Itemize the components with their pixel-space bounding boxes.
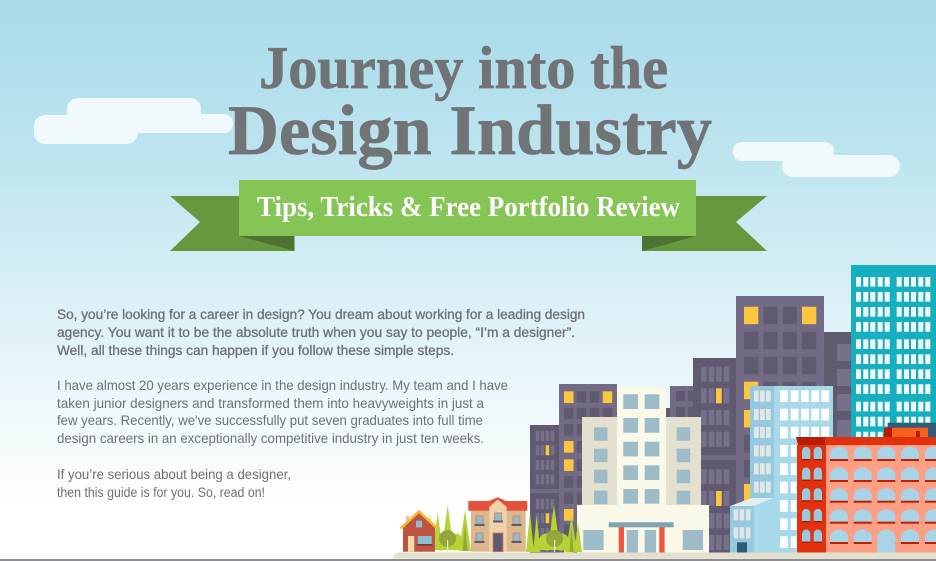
building: small purple behind [665,386,694,506]
building: cream hotel [577,387,709,553]
experience paragraph: I have almost 20 years experience in the design industry. My team and I have [57,378,508,393]
building: dark far left [530,425,559,553]
building: dark right rear [824,332,852,442]
banner ribbon [170,180,767,251]
trees: by hotel [526,505,582,552]
closing paragraph [57,467,291,500]
trees: between houses [428,505,471,552]
building: red brick block [796,423,936,553]
building: purple left [559,384,617,553]
building: tall dark [693,358,737,553]
intro paragraph: Well, all these things can happen if you follow these simple steps. [57,343,454,358]
experience paragraph: taken junior designers and transformed them into heavyweights in just a [57,396,484,411]
building: teal tower [851,265,936,445]
building: light blue tower [750,386,833,553]
house: two-storey tan [468,497,527,552]
closing paragraph: then this guide is for you. So, read on! [57,485,265,500]
experience paragraph: design careers in an exceptionally competitive industry in just ten weeks. [57,431,484,446]
experience paragraph: few years. Recently, we've successfully put seven graduates into full time [57,413,483,428]
intro paragraph: agency. You want it to be the absolute truth when you say to people, “I’m a designer”. [57,325,575,340]
title: Journey into the [259,35,668,101]
closing paragraph: If you’re serious about being a designer, [57,467,291,482]
title [228,35,712,170]
cloud: left [34,98,233,144]
building: purple tall [736,296,824,553]
ground strip [0,552,936,561]
intro paragraph: So, you’re looking for a career in design? You dream about working for a leading design [57,307,585,322]
house: small brick [400,512,438,552]
banner ribbon: Tips, Tricks & Free Portfolio Review [257,192,681,223]
intro paragraph [57,307,585,358]
title: Design Industry [228,92,712,170]
experience paragraph [57,378,508,446]
building: small blue annex [730,498,780,553]
cloud: right [733,142,900,177]
